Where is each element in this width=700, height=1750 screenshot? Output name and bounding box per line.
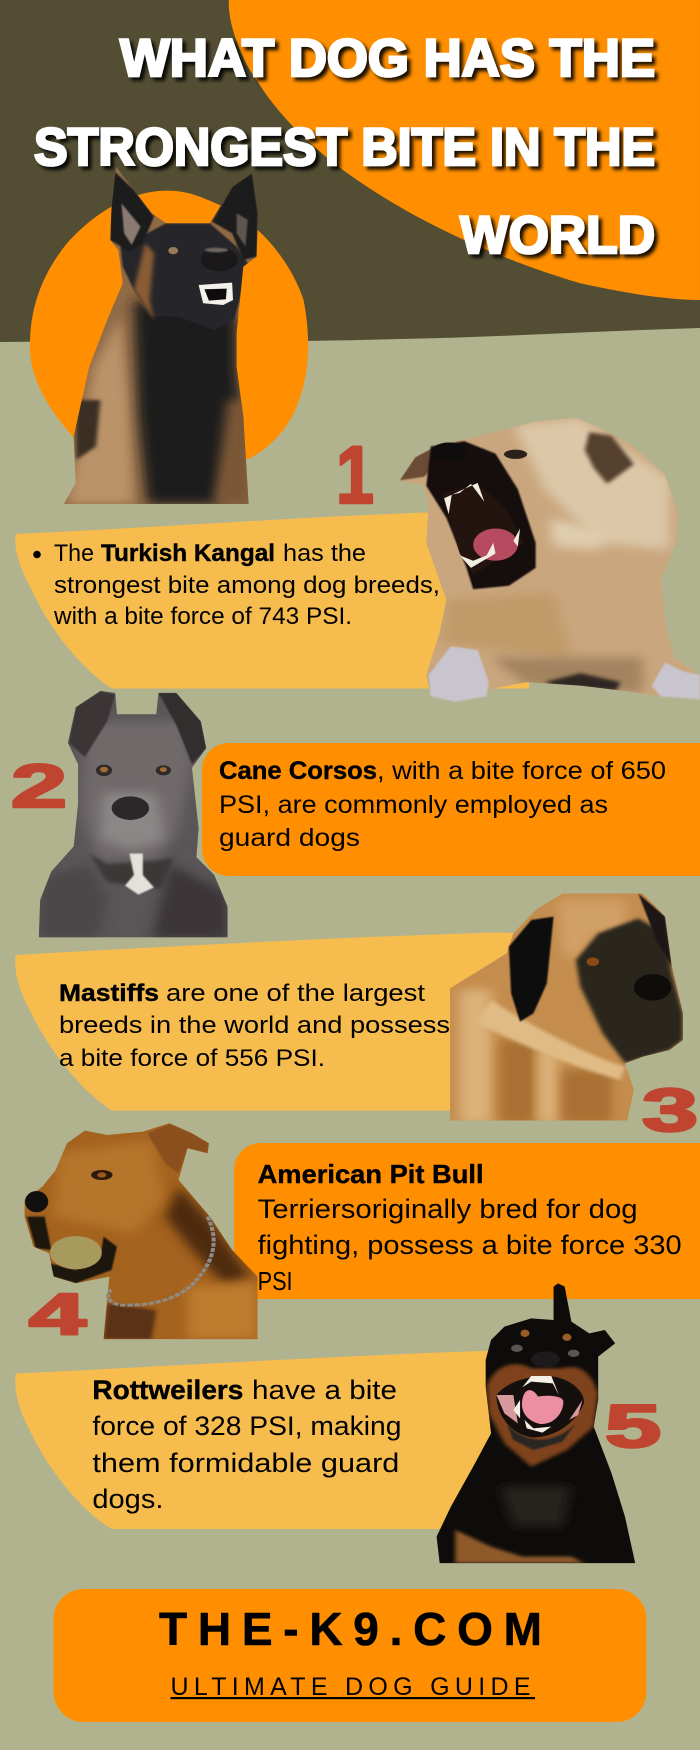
number 2: 2 — [11, 752, 67, 820]
eyes — [96, 765, 112, 776]
chain collar — [108, 1217, 214, 1305]
text: American Pit Bull — [258, 1159, 484, 1189]
photo: Rottweiler mouth open — [433, 1280, 643, 1567]
number 5: 5 — [605, 1393, 661, 1460]
nose — [432, 442, 466, 461]
text — [219, 757, 666, 852]
number 3: 3 — [642, 1077, 698, 1144]
title: WORLD — [460, 206, 655, 265]
title: STRONGEST BITE IN THE — [34, 118, 655, 177]
text — [53, 540, 440, 630]
text: The — [54, 540, 94, 567]
tongue — [522, 1390, 563, 1424]
orange box — [234, 1143, 700, 1299]
dark olive header band — [0, 0, 700, 342]
text: guard dogs — [219, 824, 360, 852]
panel: American Pit Bull — [234, 1143, 700, 1299]
photo: black and tan shepherd dog — [58, 163, 263, 507]
eye — [587, 957, 599, 966]
text: are one of the largest — [166, 980, 425, 1007]
nose — [200, 247, 238, 271]
text: , with a bite force of 650 — [377, 757, 666, 785]
text: Cane Corsos — [219, 757, 377, 785]
nose — [634, 974, 671, 1001]
panel: Rottweiler — [15, 1351, 500, 1529]
photo: Turkish Kangal snarling — [393, 414, 700, 707]
mouth — [496, 1376, 584, 1437]
text: PSI — [258, 1266, 293, 1296]
chin — [507, 1423, 576, 1450]
eye — [91, 1170, 112, 1180]
nose — [531, 1351, 560, 1367]
orange box — [202, 743, 700, 876]
orange header blob — [229, 0, 700, 300]
number 1: 1 — [336, 430, 374, 521]
orange egg behind dog — [30, 191, 308, 459]
teeth — [444, 483, 484, 514]
muzzle — [426, 441, 536, 589]
underline — [170, 1697, 535, 1699]
number 4: 4 — [29, 1282, 86, 1347]
paws — [429, 646, 489, 702]
white chest patch — [125, 854, 154, 895]
teeth — [522, 1376, 559, 1395]
text: Turkish Kangal — [101, 540, 275, 567]
photo: Cane Corso — [36, 686, 232, 943]
orange rounded box — [54, 1589, 646, 1722]
text: force of 328 PSI, making — [92, 1411, 401, 1441]
text: with a bite force of 743 PSI. — [53, 603, 352, 630]
text: a bite force of 556 PSI. — [59, 1045, 325, 1072]
brow spots — [521, 1330, 529, 1337]
title: WHAT DOG HAS THE — [120, 29, 655, 88]
photo: Mastiff — [446, 890, 687, 1123]
text — [59, 980, 450, 1072]
panel: Mastiff — [15, 932, 536, 1111]
text: PSI, are commonly employed as — [219, 791, 608, 819]
bullet — [33, 551, 41, 558]
text: them formidable guard — [92, 1448, 399, 1478]
mouth — [442, 484, 525, 575]
eyes — [511, 1345, 523, 1352]
site name: THE-K9.COM — [159, 1603, 542, 1655]
tennis ball — [50, 1236, 102, 1269]
panel: Turkish Kangal — [15, 512, 529, 689]
eye — [168, 247, 178, 254]
text: has the — [283, 540, 366, 567]
yellow blob — [15, 932, 536, 1111]
title — [34, 29, 655, 265]
eye — [504, 450, 527, 459]
ear — [509, 917, 554, 1022]
mouth — [199, 283, 233, 305]
nose — [25, 1191, 48, 1212]
text: fighting, possess a bite force 330 — [258, 1230, 682, 1260]
yellow blob — [15, 1351, 500, 1529]
text: Terriersoriginally bred for dog — [258, 1194, 638, 1224]
text — [92, 1375, 401, 1514]
yellow blob — [15, 512, 529, 689]
text — [258, 1159, 682, 1296]
text: Rottweilers — [92, 1375, 243, 1405]
cheeks — [496, 1395, 518, 1423]
tagline: ULTIMATE DOG GUIDE — [170, 1673, 530, 1701]
text: dogs. — [92, 1484, 163, 1514]
photo: American Pit Bull with ball — [22, 1120, 259, 1343]
nose — [112, 796, 149, 820]
text: strongest bite among dog breeds, — [54, 572, 440, 599]
panel: Cane Corso — [202, 743, 700, 876]
text: Mastiffs — [59, 980, 159, 1007]
text: have a bite — [252, 1375, 397, 1405]
footer panel — [54, 1589, 646, 1722]
text: breeds in the world and possess — [59, 1012, 450, 1039]
tongue — [473, 529, 518, 561]
